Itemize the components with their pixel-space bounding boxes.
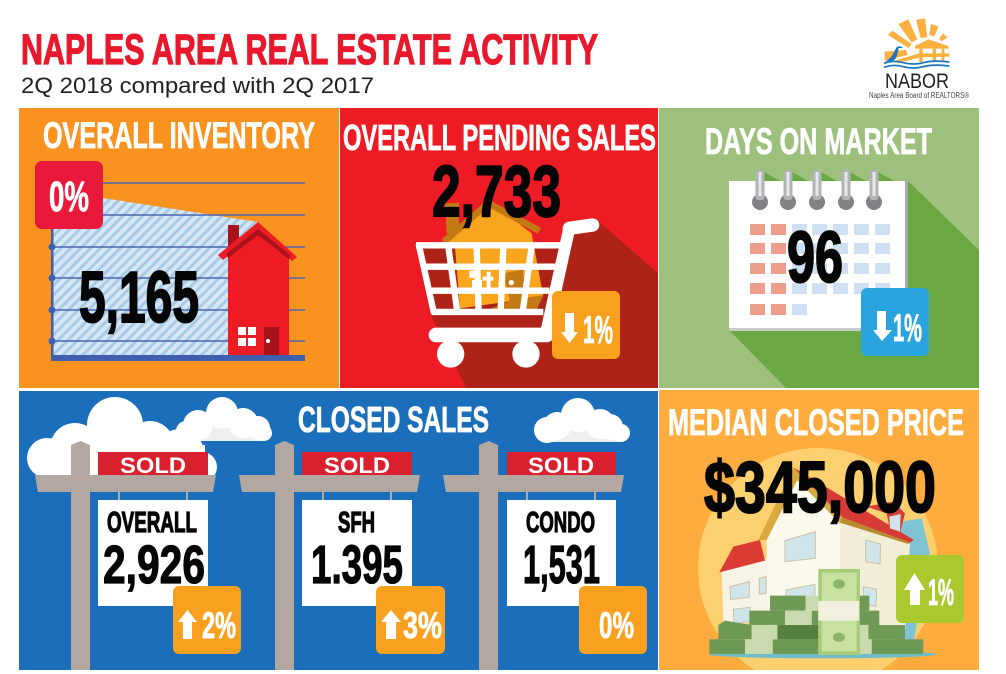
panel: days on market [659, 108, 979, 388]
icon: right cloud [534, 398, 630, 443]
sign: overall [35, 441, 241, 670]
value: 96: 96 [787, 218, 843, 298]
sign: SFH [239, 441, 445, 670]
icon: red house [218, 222, 297, 355]
heading: closed sales: CLOSED SALES [298, 399, 489, 440]
value: 2,733: 2,733 [432, 152, 561, 232]
sign: overall: 2,926 [103, 535, 205, 595]
sign: condo: CONDO [526, 507, 595, 539]
sign: condo: SOLD [528, 453, 594, 478]
value: 5,165: 5,165 [79, 258, 199, 338]
badge: down 1% [861, 288, 929, 356]
panel: overall inventory [19, 108, 339, 388]
value: $345,000: $345,000 [704, 448, 936, 528]
sign: SFH: SOLD [324, 453, 390, 478]
badge: up 1% [896, 555, 964, 623]
title: NAPLES AREA REAL ESTATE ACTIVITY [21, 26, 598, 74]
sign: SFH: 1.395 [311, 535, 403, 595]
sun circle [698, 448, 938, 674]
badge: down 1%: 1% [583, 309, 613, 352]
sign: SFH: 3% [403, 605, 442, 646]
sign: overall: OVERALL [107, 507, 197, 539]
area chart [48, 183, 305, 361]
logo tagline: Naples Area Board of REALTORS® [869, 91, 969, 100]
badge: 0%: 0% [49, 173, 89, 221]
icon: house in shopping cart [416, 200, 593, 368]
panel: closed sales [19, 391, 658, 670]
icon: house with money [709, 467, 937, 658]
sign: overall: SOLD [120, 453, 186, 478]
heading: overall pending sales: OVERALL PENDING SALES [343, 117, 656, 158]
badge: 0% [35, 161, 103, 229]
sign: condo: 0% [599, 605, 634, 646]
icon: large cloud [27, 397, 217, 482]
panel: median closed price [659, 390, 979, 674]
sign: condo [443, 441, 647, 670]
subtitle: 2Q 2018 compared with 2Q 2017 [21, 73, 374, 98]
logo wordmark: NABOR [885, 70, 949, 93]
logo: NABOR [884, 18, 949, 93]
sign: condo: 1,531 [523, 535, 600, 595]
calendar shadow [729, 172, 979, 388]
badge: down 1% [552, 291, 620, 359]
sign: overall: 2% [202, 605, 236, 646]
icon: calendar [729, 170, 908, 331]
badge: down 1%: 1% [893, 307, 922, 350]
panel: overall pending sales [340, 108, 658, 388]
icon: small cloud [176, 397, 272, 441]
cart shadow [416, 220, 658, 388]
sign: SFH: SFH [338, 507, 375, 539]
badge: up 1%: 1% [928, 572, 954, 613]
heading: overall inventory: OVERALL INVENTORY [43, 115, 315, 156]
